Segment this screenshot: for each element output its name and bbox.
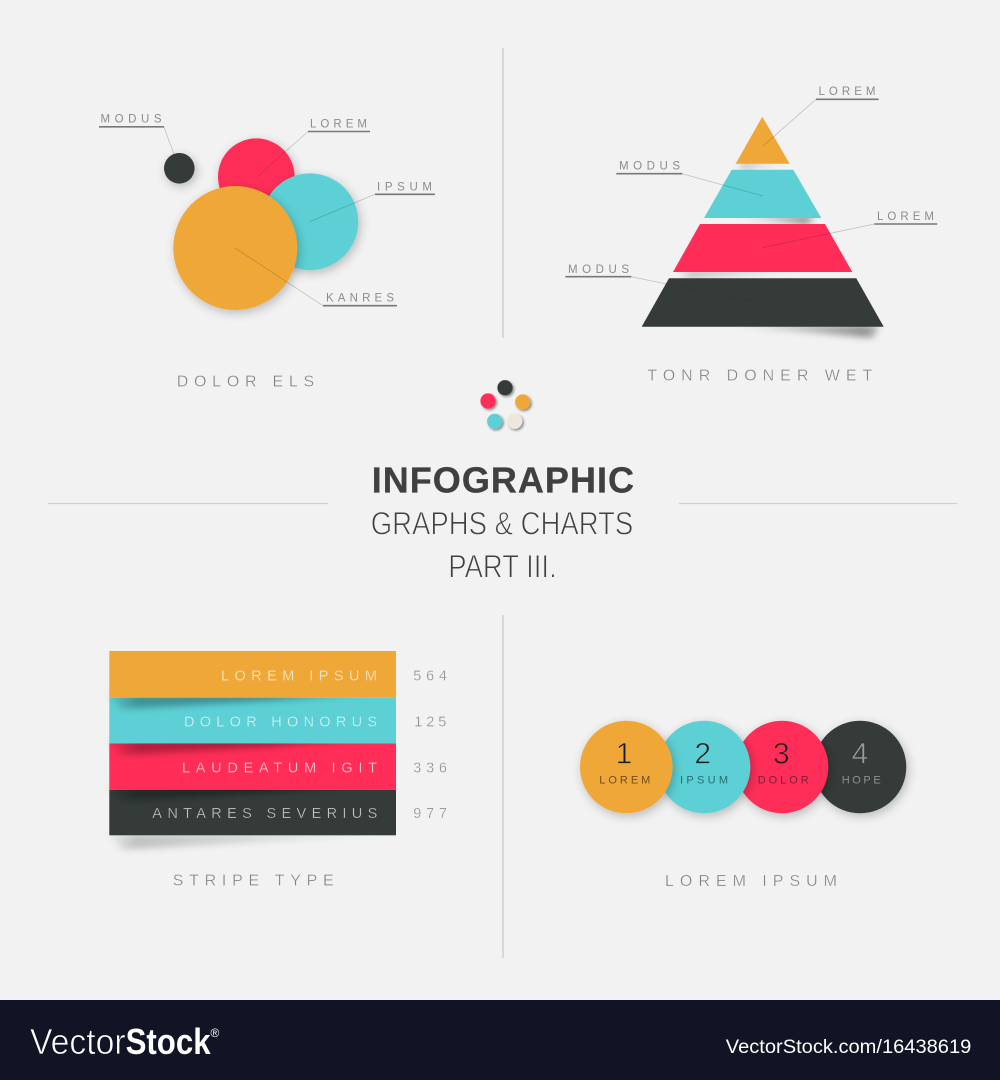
stripe: dolor honorus bbox=[104, 694, 396, 743]
label: kanres bbox=[235, 248, 397, 306]
values: 125 bbox=[414, 715, 446, 731]
label: modus lower bbox=[565, 264, 762, 303]
stripe: antares severius bbox=[104, 786, 396, 835]
subtitle: part iii: PART III. bbox=[448, 548, 557, 584]
title block bbox=[371, 459, 634, 584]
circle 3: dolor bbox=[736, 721, 828, 813]
values: 336 bbox=[413, 761, 447, 777]
footer id text: VectorStock.com/16438619 bbox=[726, 1037, 971, 1058]
circle 4: hope: HOPE bbox=[842, 774, 881, 786]
bubble: red bbox=[218, 138, 295, 215]
circle 4: hope: 4 bbox=[852, 737, 868, 770]
label: modus: MODUS bbox=[100, 114, 162, 126]
panel: stripe chart bbox=[104, 651, 447, 850]
values bbox=[413, 669, 447, 822]
label: lorem lower: LOREM bbox=[877, 211, 934, 223]
pyramid tier: dark bbox=[642, 278, 884, 338]
label: lorem top: LOREM bbox=[818, 86, 876, 98]
icon: five dots bbox=[480, 380, 530, 429]
pyramid tier: orange bbox=[736, 117, 790, 170]
label: lorem bbox=[257, 118, 370, 177]
label: modus bbox=[99, 114, 179, 168]
label: kanres: KANRES bbox=[326, 292, 394, 304]
label: lorem lower bbox=[762, 211, 937, 248]
bubble: orange bbox=[173, 186, 297, 310]
logo: vectorstock bbox=[30, 1021, 220, 1062]
subtitle: graphs and charts: GRAPHS & CHARTS bbox=[371, 506, 633, 542]
values: 564 bbox=[413, 669, 447, 685]
circle 4: hope bbox=[814, 721, 906, 813]
logo: vectorstock: Vector bbox=[30, 1021, 126, 1062]
pyramid tier: teal bbox=[704, 170, 821, 225]
label: modus upper: MODUS bbox=[619, 161, 680, 173]
caption: lorem ipsum: LOREM IPSUM bbox=[665, 873, 837, 890]
logo: vectorstock: ® bbox=[210, 1026, 220, 1040]
caption: stripe type: STRIPE TYPE bbox=[173, 873, 334, 890]
values: 977 bbox=[413, 806, 447, 822]
circle 1: lorem bbox=[580, 721, 673, 813]
stripe: antares severius: ANTARES SEVERIUS bbox=[152, 806, 377, 822]
bubble: teal bbox=[262, 173, 358, 270]
label: lorem top bbox=[763, 86, 879, 146]
circle 1: lorem: 1 bbox=[616, 737, 632, 770]
circle 1: lorem: LOREM bbox=[599, 774, 650, 786]
label: lorem: LOREM bbox=[310, 118, 367, 130]
footer bar bbox=[0, 1000, 1000, 1080]
circle 2: ipsum: IPSUM bbox=[680, 774, 728, 786]
stripe: lorem ipsum: LOREM IPSUM bbox=[221, 669, 377, 685]
circle 2: ipsum: 2 bbox=[694, 737, 711, 770]
stripe: laudeatum igit bbox=[104, 740, 396, 790]
circle 2: ipsum bbox=[658, 721, 750, 813]
logo: vectorstock: Stock bbox=[126, 1021, 211, 1062]
label: modus upper bbox=[616, 161, 763, 196]
panel: numbered circles bbox=[580, 721, 906, 813]
circle 3: dolor: DOLOR bbox=[758, 774, 809, 786]
stripe: dolor honorus: DOLOR HONORUS bbox=[184, 715, 377, 731]
panel: bubble chart bbox=[99, 114, 435, 310]
bubble: dark bbox=[164, 153, 195, 184]
label: ipsum: IPSUM bbox=[377, 182, 432, 194]
panel: pyramid chart bbox=[565, 86, 937, 338]
label: modus lower: MODUS bbox=[568, 264, 629, 276]
label: ipsum bbox=[310, 182, 435, 222]
stripe: lorem ipsum bbox=[109, 651, 396, 698]
caption: tonr doner wet: TONR DONER WET bbox=[647, 368, 873, 384]
circle 3: dolor: 3 bbox=[773, 737, 790, 770]
stripe: laudeatum igit: LAUDEATUM IGIT bbox=[182, 761, 377, 777]
caption: dolor els: DOLOR ELS bbox=[177, 374, 314, 391]
pyramid tier: red bbox=[673, 224, 852, 279]
title: infographic: INFOGRAPHIC bbox=[372, 459, 634, 500]
